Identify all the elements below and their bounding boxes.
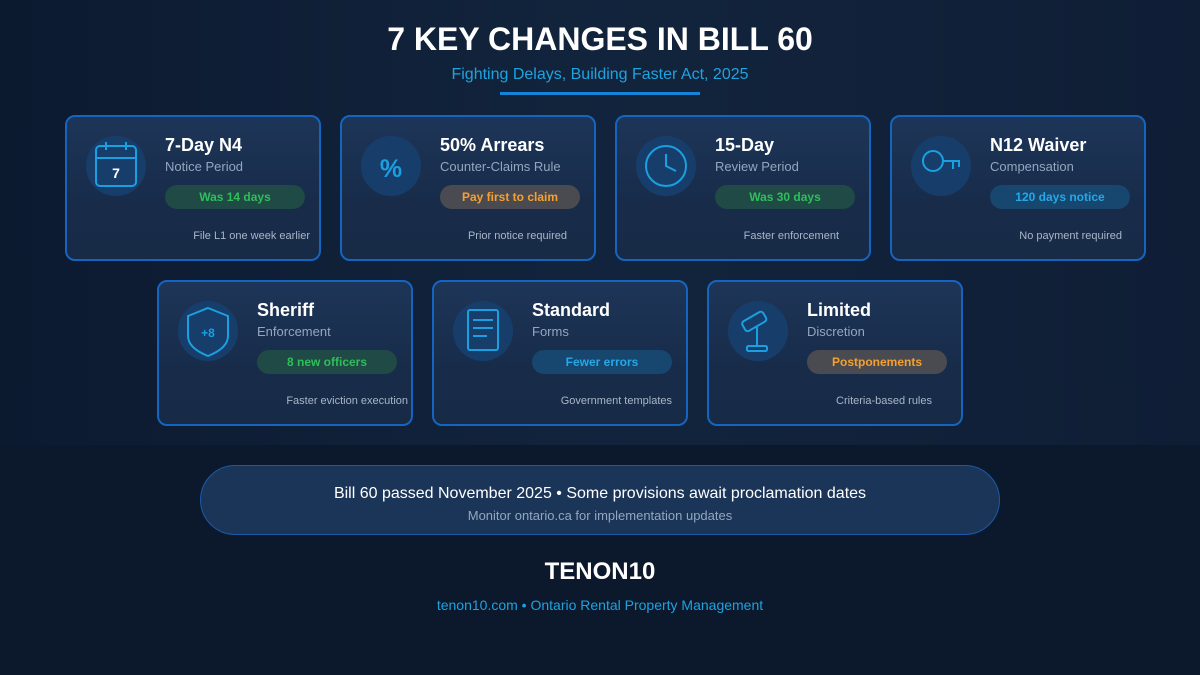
card: 7-Day N4: 7-Day N4 — [165, 135, 242, 155]
title: 7 KEY CHANGES IN BILL 60 — [387, 21, 813, 57]
icon: shield — [178, 301, 238, 361]
card: Sheriff: Faster eviction execution — [286, 395, 408, 407]
subtitle: Fighting Delays, Building Faster Act, 2025 — [451, 66, 749, 83]
card: 15-Day: Was 30 days — [749, 190, 821, 204]
card: Standard Forms: Forms — [532, 324, 569, 339]
card: 7-Day N4 — [65, 115, 321, 261]
card: N12 Waiver: 120 days notice — [1015, 190, 1105, 204]
card: 50% Arrears: 50% Arrears — [440, 135, 544, 155]
card: 15-Day — [615, 115, 871, 261]
card: Standard Forms — [432, 280, 688, 426]
card: 15-Day: Review Period — [715, 159, 799, 174]
icon: percent — [361, 136, 421, 196]
card: 50% Arrears — [340, 115, 596, 261]
icon: document — [453, 301, 513, 361]
card: N12 Waiver — [890, 115, 1146, 261]
card: N12 Waiver: No payment required — [1019, 230, 1122, 242]
card: 7-Day N4: Notice Period — [165, 159, 243, 174]
card: N12 Waiver: Compensation — [990, 159, 1074, 174]
card: Sheriff — [157, 280, 413, 426]
icon: clock — [636, 136, 696, 196]
card: Sheriff: Sheriff — [257, 300, 314, 320]
banner text: Bill 60 passed November 2025 • Some provisions await proclamation dates — [334, 485, 866, 502]
card: Limited Discretion: Criteria-based rules — [836, 395, 932, 407]
card: 50% Arrears: Counter-Claims Rule — [440, 159, 561, 174]
card: Limited Discretion: Discretion — [807, 324, 865, 339]
icon: shield: +8 — [201, 326, 215, 340]
card: Sheriff: 8 new officers — [287, 355, 367, 369]
card: Standard Forms: Standard — [532, 300, 610, 320]
brand: TENON10 — [545, 558, 655, 585]
icon: calendar: 7 — [112, 165, 120, 181]
card: Limited Discretion: Postponements — [832, 355, 922, 369]
card: 50% Arrears: Prior notice required — [468, 230, 567, 242]
card: Limited Discretion — [707, 280, 963, 426]
footer: tenon10.com • Ontario Rental Property Management — [437, 597, 763, 613]
card: 7-Day N4: Was 14 days — [199, 190, 271, 204]
underline — [500, 92, 700, 95]
card: Sheriff: Enforcement — [257, 324, 331, 339]
card: Limited Discretion: Limited — [807, 300, 871, 320]
card: 15-Day: 15-Day — [715, 135, 774, 155]
banner subtext: Monitor ontario.ca for implementation updates — [468, 508, 732, 523]
card: 7-Day N4: File L1 one week earlier — [193, 230, 310, 242]
icon: gavel — [728, 301, 788, 361]
card: 15-Day: Faster enforcement — [744, 230, 839, 242]
card: Standard Forms: Government templates — [561, 395, 672, 407]
icon: percent: % — [380, 155, 402, 183]
card: N12 Waiver: N12 Waiver — [990, 135, 1086, 155]
card: Standard Forms: Fewer errors — [566, 355, 638, 369]
icon: key — [911, 136, 971, 196]
banner — [200, 465, 1000, 535]
icon: calendar — [86, 136, 146, 196]
card: 50% Arrears: Pay first to claim — [462, 190, 558, 204]
